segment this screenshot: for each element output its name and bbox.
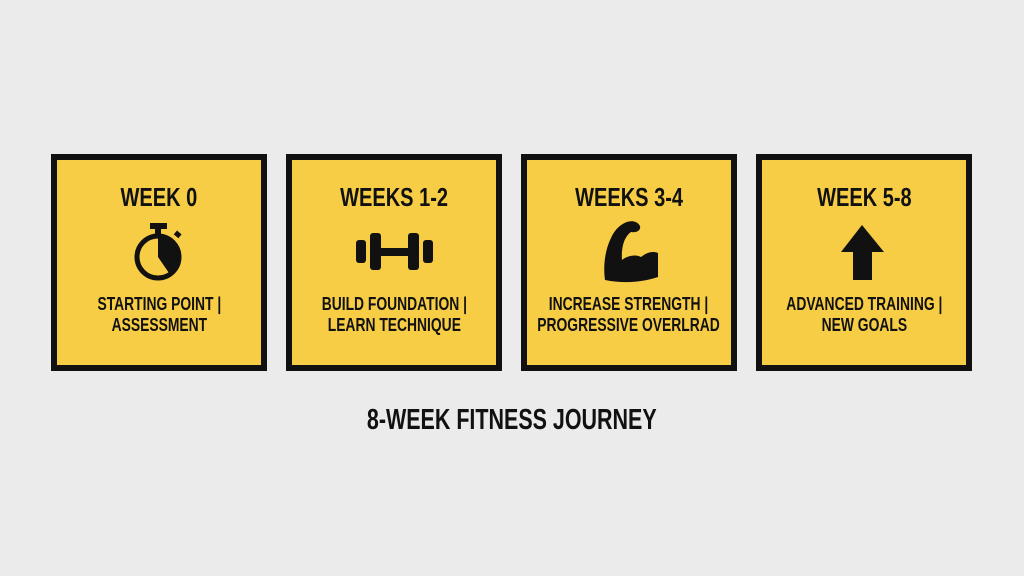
icon: stopwatch bbox=[134, 223, 182, 280]
text: build foundation: BUILD FOUNDATION | bbox=[321, 294, 467, 314]
text: starting point: ASSESSMENT bbox=[111, 315, 207, 335]
text: advanced training: ADVANCED TRAINING | bbox=[786, 294, 942, 314]
panel: weeks 5-8 bbox=[756, 154, 972, 371]
icon: flexed arm bbox=[604, 221, 658, 282]
text: increase strength: INCREASE STRENGTH | bbox=[549, 294, 709, 314]
text: build foundation: LEARN TECHNIQUE bbox=[327, 315, 461, 335]
heading: week 5-8: WEEK 5-8 bbox=[817, 182, 911, 212]
text: starting point bbox=[97, 294, 221, 335]
heading: weeks 1-2: WEEKS 1-2 bbox=[340, 182, 448, 212]
heading: week 0: WEEK 0 bbox=[121, 182, 197, 212]
title: 8-WEEK FITNESS JOURNEY bbox=[367, 404, 657, 436]
text: increase strength bbox=[538, 294, 720, 335]
icon: up arrow bbox=[841, 225, 884, 280]
text: advanced training: NEW GOALS bbox=[821, 315, 907, 335]
panel: weeks 3-4 bbox=[521, 154, 737, 371]
text: starting point: STARTING POINT | bbox=[97, 294, 221, 314]
panel: week 0 bbox=[51, 154, 267, 371]
text: advanced training bbox=[786, 294, 942, 335]
icon: dumbbell bbox=[356, 233, 433, 270]
text: build foundation bbox=[321, 294, 467, 335]
text: increase strength: PROGRESSIVE OVERLRAD bbox=[538, 315, 720, 335]
heading: weeks 3-4: WEEKS 3-4 bbox=[575, 182, 683, 212]
panel: weeks 1-2 bbox=[286, 154, 502, 371]
